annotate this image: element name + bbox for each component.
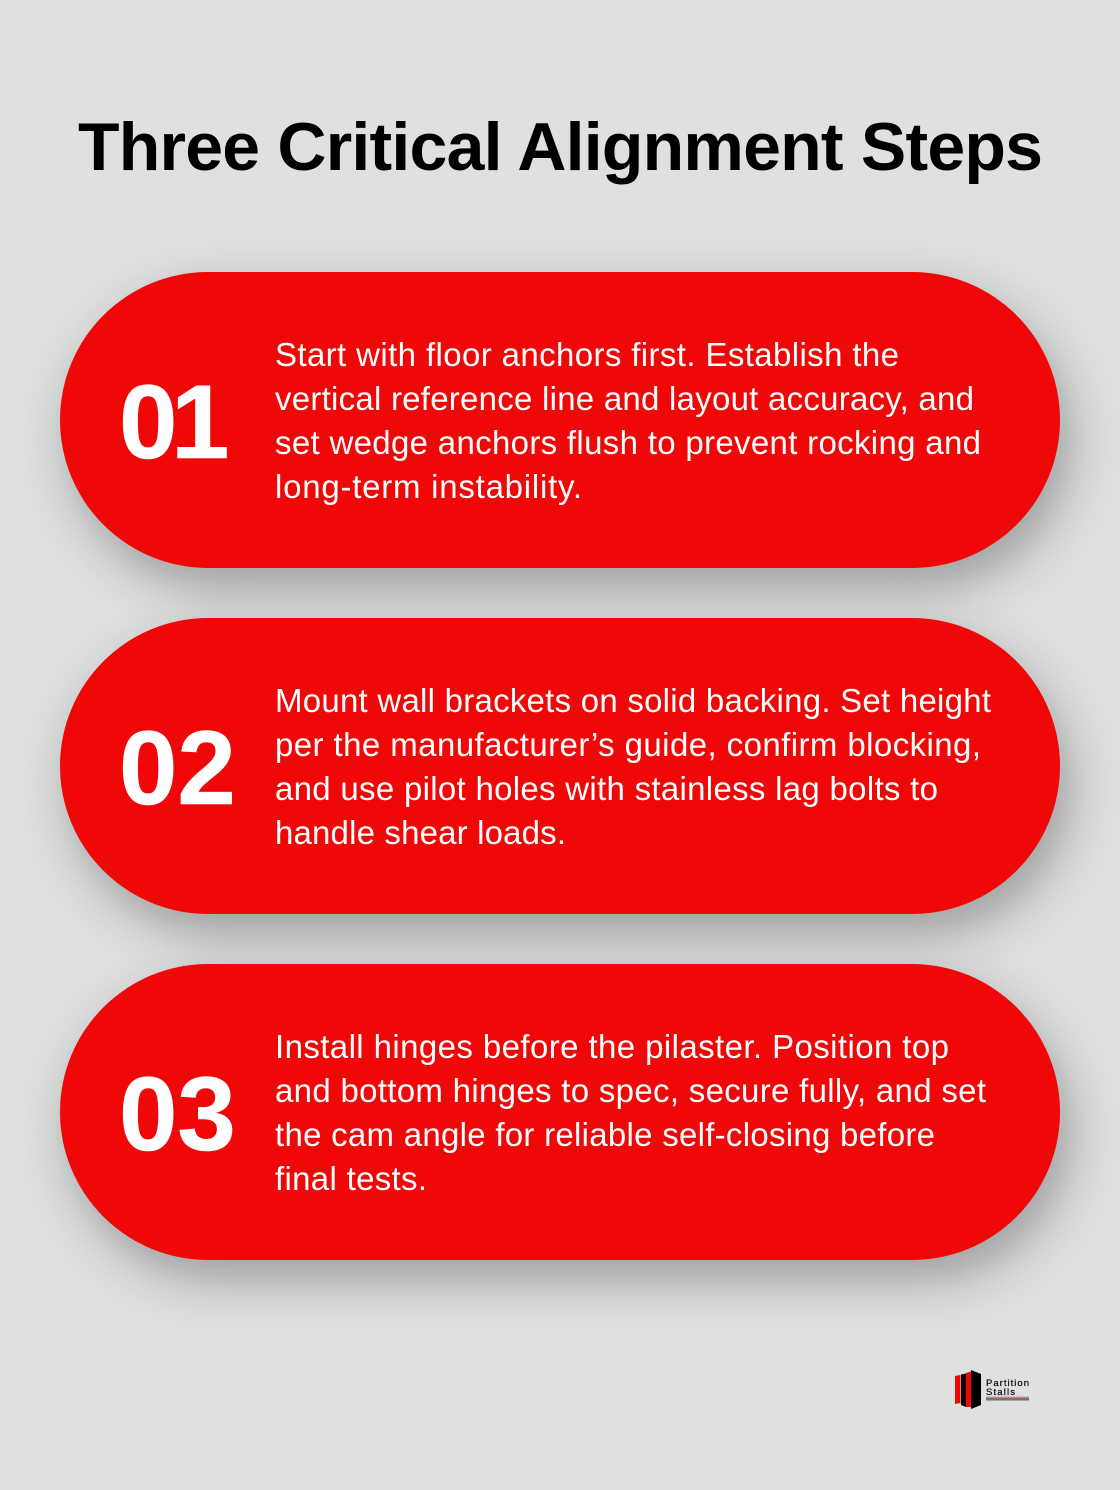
step 02 text: Mount wall brackets on solid backing. Set height — [275, 682, 991, 719]
step 03 text: Install hinges before the pilaster. Position top — [275, 1028, 949, 1065]
step 02 text: and use pilot holes with stainless lag bolts to — [275, 770, 938, 807]
panel: step 02 — [60, 618, 1060, 914]
step 03 text: and bottom hinges to spec, secure fully, and set — [275, 1072, 986, 1109]
logo wordmark: Partition — [986, 1378, 1029, 1389]
panel: step 03 — [60, 964, 1060, 1260]
panel: step 01 — [60, 272, 1060, 568]
logo wordmark: Stalls — [986, 1387, 1015, 1398]
step number 02: 02 — [119, 710, 236, 827]
step 03 text: the cam angle for reliable self-closing before — [275, 1116, 935, 1153]
step 01 text: vertical reference line and layout accuracy, and — [275, 380, 974, 417]
step 03 text — [275, 1028, 986, 1197]
step 01 text: long-term instability. — [275, 468, 582, 505]
logo tagline bar — [986, 1396, 1029, 1400]
logo: Partition Stalls — [955, 1370, 1029, 1409]
title: Three Critical Alignment Steps — [78, 109, 1043, 185]
step 03 text: final tests. — [275, 1160, 427, 1197]
step 02 text: per the manufacturer’s guide, confirm blocking, — [275, 726, 981, 763]
step 02 text — [275, 682, 991, 851]
step 01 text — [275, 336, 981, 505]
step 01 text: set wedge anchors flush to prevent rocking and — [275, 424, 981, 461]
step 02 text: handle shear loads. — [275, 814, 566, 851]
step 01 text: Start with floor anchors first. Establish the — [275, 336, 899, 373]
logo wordmark — [986, 1378, 1029, 1398]
step number 01: 01 — [119, 364, 229, 481]
step number 03: 03 — [119, 1056, 236, 1173]
icon: partition panels — [955, 1370, 981, 1409]
